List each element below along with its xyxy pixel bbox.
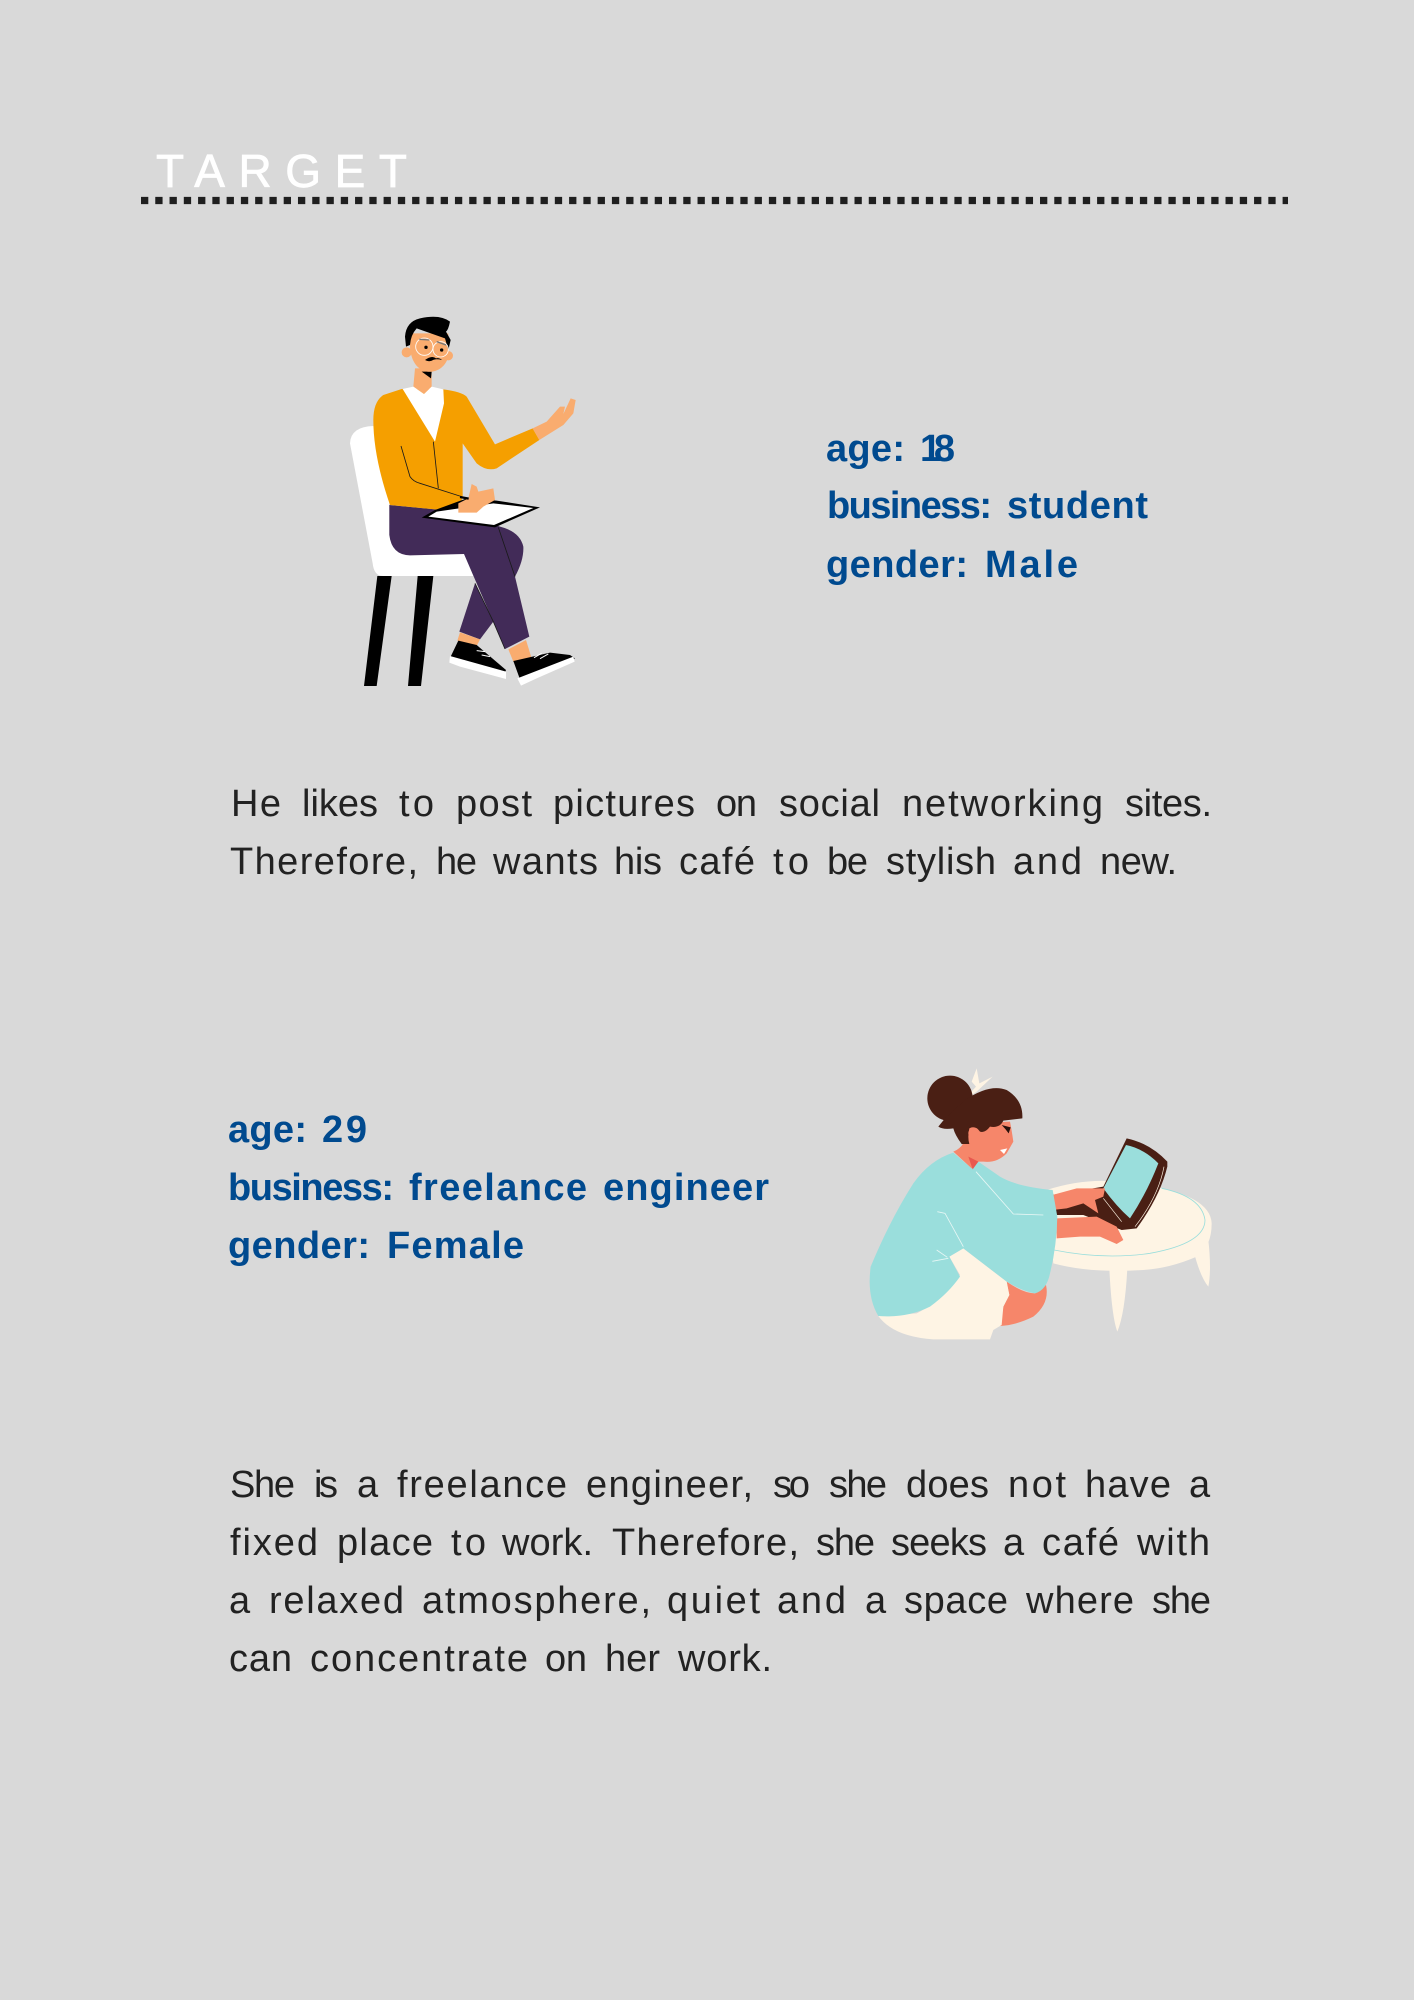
description: man: he — [436, 841, 477, 883]
description: woman: is — [314, 1464, 338, 1506]
description: man: to — [773, 841, 809, 883]
description: woman: can — [229, 1638, 292, 1680]
description: woman: a — [1003, 1522, 1025, 1564]
description: man: café — [679, 841, 755, 883]
description: man — [230, 783, 1212, 883]
description: woman: she — [829, 1464, 887, 1506]
description: woman: on — [545, 1638, 587, 1680]
description: woman: with — [1136, 1522, 1210, 1564]
description: man: new. — [1100, 841, 1177, 883]
description: woman: place — [337, 1522, 433, 1564]
description: man: post — [456, 783, 532, 825]
description: woman: concentrate — [310, 1638, 528, 1680]
description: man: likes — [302, 783, 378, 825]
description: woman: a — [357, 1464, 379, 1506]
description: man: be — [827, 841, 868, 883]
description: woman: have — [1085, 1464, 1171, 1506]
info: woman: engineer — [603, 1167, 769, 1209]
info: woman: 29 — [322, 1109, 367, 1151]
description: man: networking — [902, 783, 1103, 825]
info: woman: Female — [387, 1225, 524, 1267]
info: woman — [228, 1109, 769, 1267]
description: man: sites. — [1125, 783, 1212, 825]
description: woman: to — [451, 1522, 486, 1564]
info: man: age: — [826, 428, 905, 470]
description: woman: so — [773, 1464, 810, 1506]
description: woman: a — [1189, 1464, 1211, 1506]
description: man: He — [231, 783, 281, 825]
description: woman: and — [777, 1580, 846, 1622]
description: woman: fixed — [230, 1522, 318, 1564]
description: woman: café — [1042, 1522, 1119, 1564]
description: woman: quiet — [667, 1580, 760, 1622]
description: woman: not — [1008, 1464, 1066, 1506]
info: woman: gender: — [228, 1225, 370, 1267]
info: man — [826, 428, 1148, 586]
description: woman: Therefore, — [612, 1522, 799, 1564]
description: woman: space — [904, 1580, 1008, 1622]
description: man: stylish — [886, 841, 996, 883]
description: woman: engineer, — [586, 1464, 753, 1506]
description: woman: she — [1152, 1580, 1211, 1622]
description: woman — [229, 1464, 1211, 1680]
description: woman: work. — [677, 1638, 772, 1680]
description: woman: where — [1025, 1580, 1134, 1622]
info: man: business: — [827, 485, 992, 527]
description: woman: her — [605, 1638, 660, 1680]
info: man: student — [1007, 485, 1148, 527]
description: woman: freelance — [397, 1464, 567, 1506]
description: man: wants — [492, 841, 598, 883]
description: woman: a — [229, 1580, 251, 1622]
description: man: social — [779, 783, 880, 825]
info: man: gender: — [826, 544, 968, 586]
title: TARGET — [156, 145, 407, 197]
description: man: pictures — [553, 783, 695, 825]
info: man: 18 — [920, 428, 955, 470]
description: woman: atmosphere, — [422, 1580, 651, 1622]
description: woman: she — [816, 1522, 875, 1564]
description: woman: She — [230, 1464, 295, 1506]
description: man: to — [399, 783, 434, 825]
description: man: on — [716, 783, 757, 825]
description: woman: relaxed — [269, 1580, 404, 1622]
info: woman: age: — [228, 1109, 307, 1151]
info: woman: freelance — [409, 1167, 587, 1209]
info: man: Male — [985, 544, 1078, 586]
description: woman: seeks — [891, 1522, 987, 1564]
description: man: his — [614, 841, 662, 883]
description: woman: a — [865, 1580, 887, 1622]
description: man: and — [1013, 841, 1082, 883]
description: man: Therefore, — [230, 841, 418, 883]
illustration: seated man with clipboard — [350, 317, 576, 686]
info: woman: business: — [228, 1167, 394, 1209]
description: woman: does — [906, 1464, 989, 1506]
description: woman: work. — [501, 1522, 593, 1564]
illustration: woman with laptop at round table — [870, 1068, 1212, 1339]
